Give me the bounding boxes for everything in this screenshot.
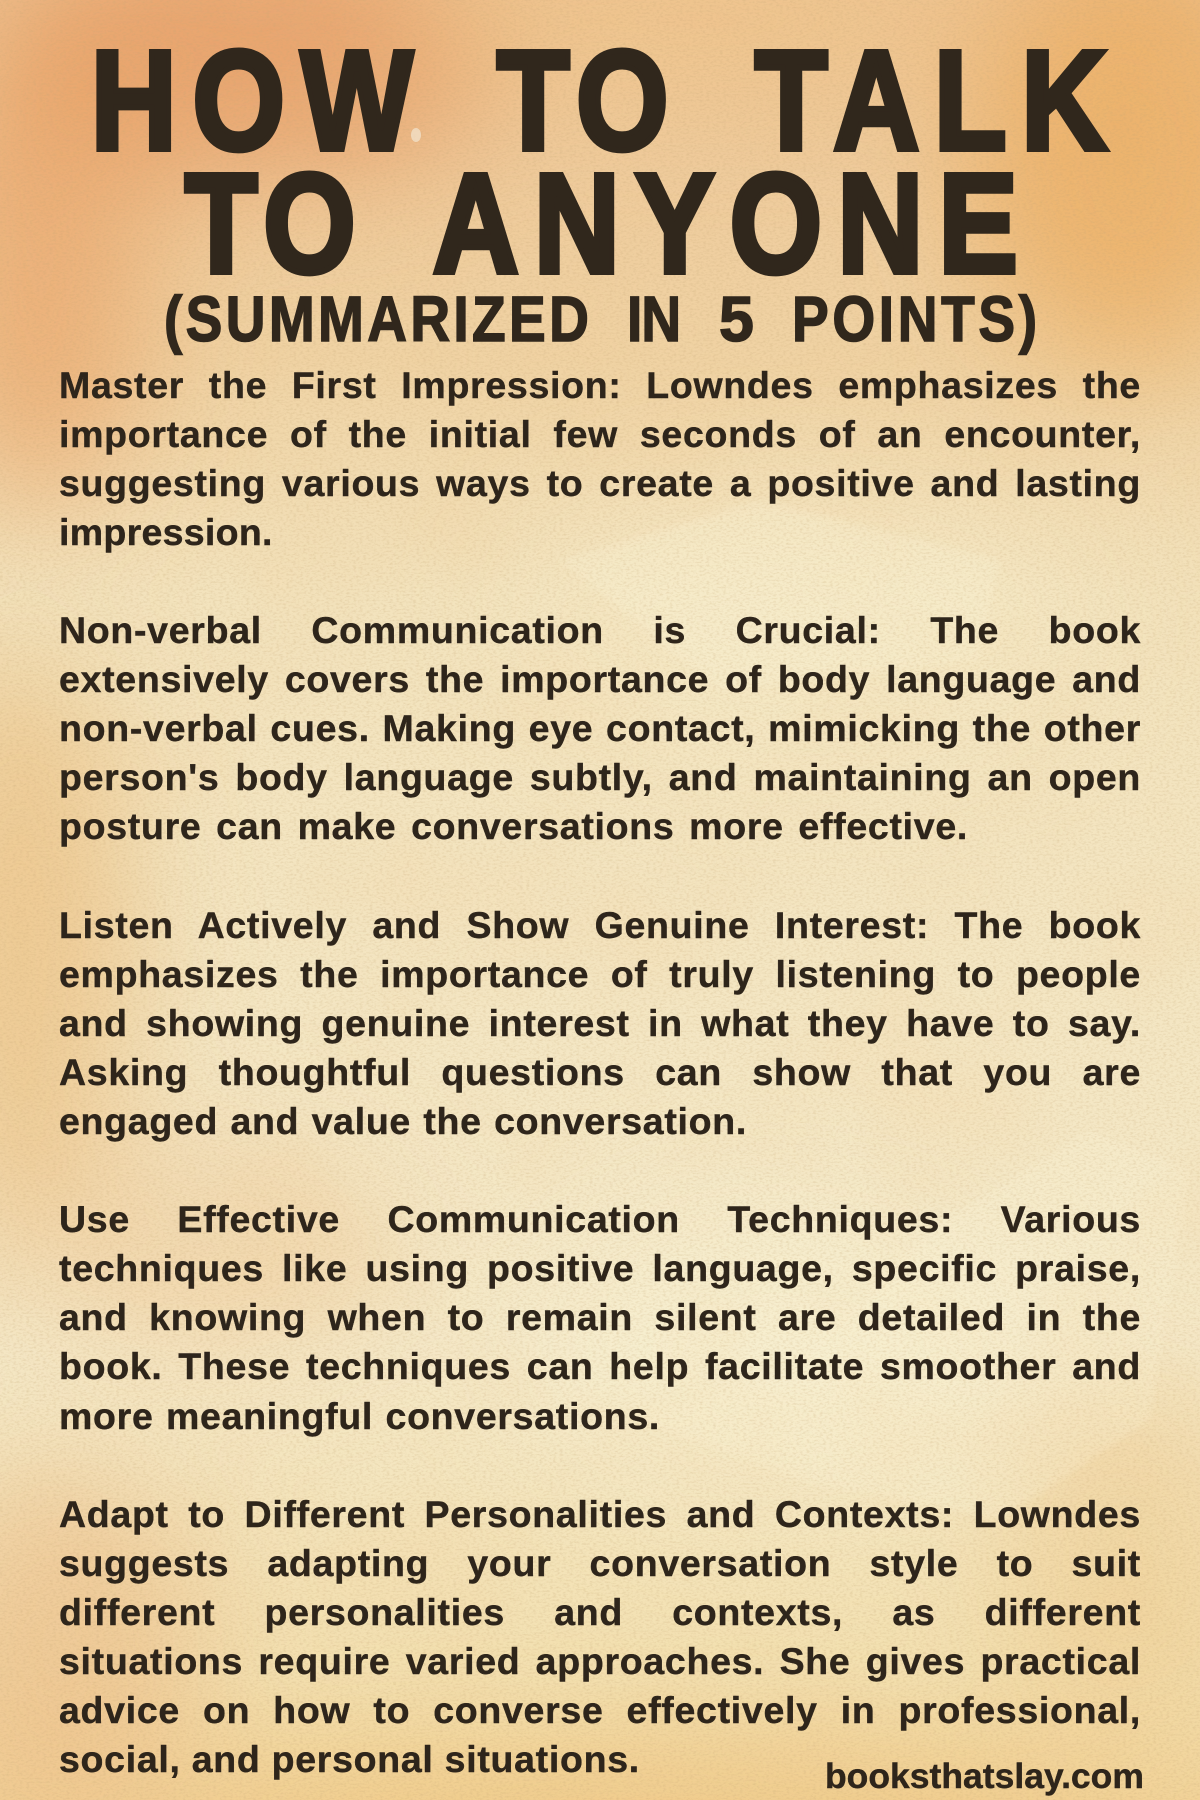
point 3: listen actively: and showing genuine interest in what they have to say.	[59, 1002, 1141, 1044]
title line 1: TO	[497, 21, 668, 179]
point 2: non-verbal communication	[59, 609, 1141, 847]
point 4: communication techniques	[59, 1198, 1141, 1437]
title line 1	[91, 21, 1107, 179]
subtitle: IN	[627, 283, 681, 355]
title line 2: ANYONE	[433, 144, 1018, 302]
title and subtitle	[91, 21, 1111, 356]
point 2: non-verbal communication: Non-verbal Communication is Crucial: The book	[59, 609, 1141, 651]
point 2: non-verbal communication: person's body language subtly, and maintaining an open	[59, 756, 1141, 798]
title line 2: TO	[185, 144, 356, 302]
point 5: adapt to personalities: Adapt to Different Personalities and Contexts: Lowndes	[59, 1493, 1141, 1535]
title line 1: TALK	[755, 21, 1107, 179]
title line 1: HOW	[91, 21, 413, 179]
point 5: adapt to personalities: different personalities and contexts, as different	[59, 1591, 1141, 1633]
point 5: adapt to personalities	[59, 1493, 1141, 1780]
point 5: adapt to personalities: situations require varied approaches. She gives practical	[59, 1640, 1141, 1682]
point 3: listen actively: engaged and value the conversation.	[59, 1100, 747, 1142]
subtitle: 5	[719, 284, 754, 355]
point 1: first impression: importance of the initial few seconds of an encounter,	[59, 413, 1141, 455]
point 5: adapt to personalities: suggests adapting your conversation style to suit	[59, 1542, 1141, 1584]
point 2: non-verbal communication: posture can make conversations more effective.	[59, 805, 968, 847]
point 3: listen actively: Asking thoughtful questions can show that you are	[59, 1051, 1141, 1093]
point 4: communication techniques: techniques like using positive language, specific praise,	[59, 1247, 1141, 1289]
point 4: communication techniques: more meaningful conversations.	[59, 1395, 660, 1437]
point 3: listen actively: emphasizes the importance of truly listening to people	[59, 953, 1141, 995]
point 2: non-verbal communication: non-verbal cues. Making eye contact, mimicking the other	[59, 707, 1141, 749]
point 1: first impression: suggesting various ways to create a positive and lasting	[59, 462, 1141, 504]
subtitle: POINTS)	[792, 283, 1037, 355]
subtitle: (SUMMARIZED	[164, 283, 589, 355]
point 1: first impression: impression.	[59, 511, 273, 553]
point 4: communication techniques: and knowing when to remain silent are detailed in the	[59, 1296, 1141, 1338]
point 4: communication techniques: Use Effective Communication Techniques: Various	[59, 1198, 1141, 1240]
point 5: adapt to personalities: advice on how to converse effectively in professional,	[59, 1689, 1141, 1731]
point 5: adapt to personalities: social, and personal situations.	[59, 1738, 640, 1780]
point 2: non-verbal communication: extensively covers the importance of body language and	[59, 658, 1141, 700]
point 3: listen actively	[59, 904, 1141, 1142]
point 1: first impression: Master the First Impression: Lowndes emphasizes the	[59, 364, 1141, 406]
point 3: listen actively: Listen Actively and Show Genuine Interest: The book	[59, 904, 1141, 946]
point 1: first impression	[59, 364, 1141, 553]
footer: website: booksthatslay.com	[825, 1756, 1144, 1796]
point 4: communication techniques: book. These techniques can help facilitate smoother and	[59, 1345, 1141, 1387]
subtitle	[164, 283, 1037, 355]
